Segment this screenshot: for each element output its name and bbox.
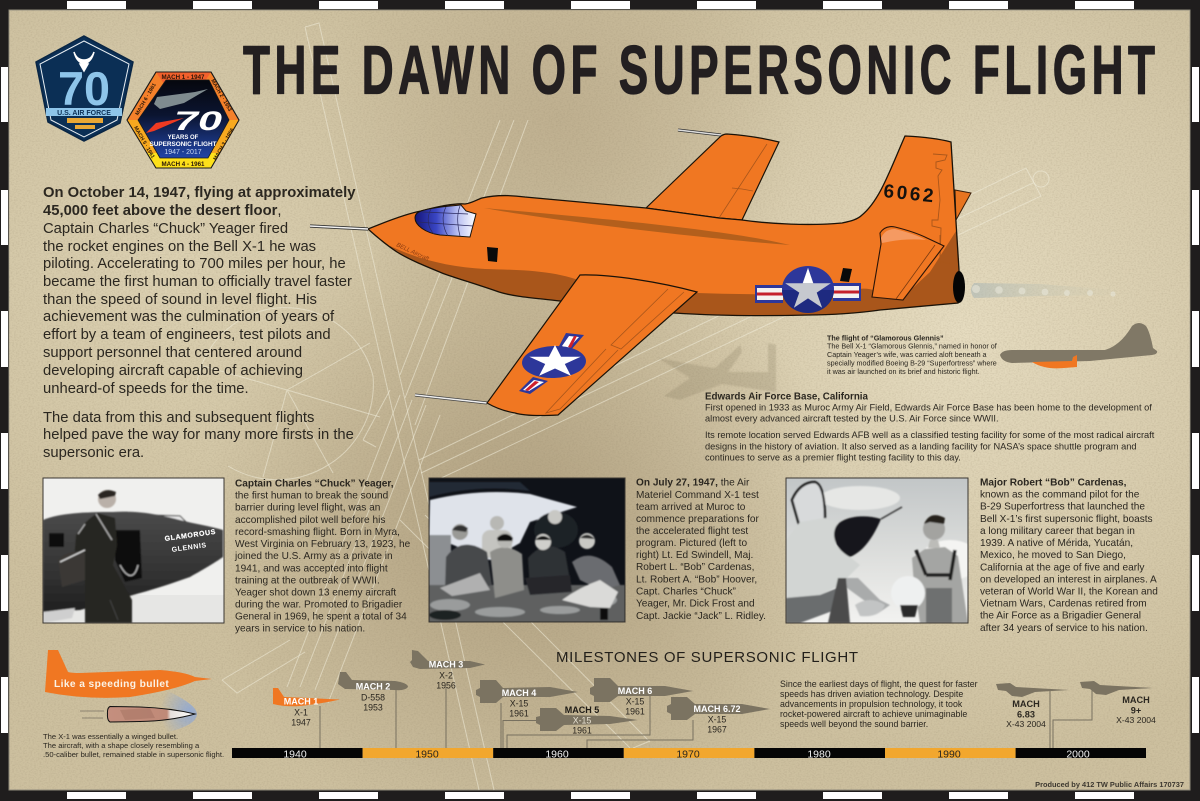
text: Captain Charles Yeager: training at the outbreak of WWII.	[235, 576, 380, 586]
milestone: Mach 6.83	[996, 683, 1069, 729]
photo: Yeager with Glamorous Glennis: GLENNIS	[171, 542, 207, 554]
badge: 70 years of supersonic flight: MACH 5 · 1961	[132, 125, 156, 160]
text: Edwards Air Force Base: Its remote location served Edwards AFB well as a classified testing facility for some of the most radical aircraft	[705, 430, 1155, 440]
wing roundel	[519, 333, 587, 394]
text: July 27, 1947: On July 27, 1947, the Air	[636, 478, 750, 488]
text: July 27, 1947: the accelerated flight test	[636, 526, 748, 537]
text: Captain Charles Yeager: barrier during level flight, was an	[235, 502, 380, 514]
intro text block: effort by a team of engineers, test pilots and	[43, 327, 331, 343]
illustration: orange Bell X-1	[310, 130, 971, 416]
badge: 70 years of supersonic flight: SUPERSONIC FLIGHT	[149, 141, 217, 148]
intro text block: support personnel that centered around	[43, 345, 302, 361]
milestone: Mach 4: X-15	[510, 698, 528, 708]
timeline bar by decade: 1960	[545, 748, 569, 760]
text: earliest days of flight: Since the earliest days of flight, the quest for faster	[780, 679, 978, 689]
text: Major Robert Cardenas: 1939. A native of Mérida, Yucatán,	[980, 538, 1133, 549]
text: Edwards Air Force Base: designs in the history of aviation. It also served as a landing facility for NASA’s space shuttle program and	[705, 442, 1137, 452]
text: Major Robert Cardenas: veteran of World War II, the Korean and	[980, 586, 1158, 598]
milestone: Mach 9+: MACH	[1122, 695, 1150, 705]
text: July 27, 1947: program. Pictured (left to	[636, 538, 747, 549]
text: earliest days of flight: speeds well beyond the sound barrier.	[780, 719, 928, 729]
text: Edwards Air Force Base: Edwards Air Force Base, California	[705, 392, 869, 402]
text: Captain Charles Yeager: Captain Charles “Chuck” Yeager,	[235, 478, 394, 490]
text: Captain Charles Yeager: during the war. Promoted to Brigadier	[235, 600, 403, 610]
text: Captain Charles Yeager: 1941, and was accepted into flight	[235, 564, 388, 574]
text: the flight of Glamorous Glennis: Captain Yeager’s wife, was carried aloft beneath a	[827, 350, 987, 359]
milestone: Mach 6.72: X-15	[708, 714, 726, 724]
near tailplane	[872, 227, 944, 300]
badge: 70 years of supersonic flight: MACH 6 · 1961	[135, 82, 158, 117]
text: Major Robert Cardenas: Bell X-1’s first supersonic flight, boasts	[980, 514, 1153, 525]
badge: 70 years of supersonic flight: YEARS OF	[168, 135, 199, 141]
faint white blueprint of the X-1 in the background	[197, 23, 1049, 790]
badge: 70 years of supersonic flight: MACH 3 · 1956	[213, 127, 236, 162]
text: X-1 winged bullet caption: The aircraft, with a shape closely resembling a	[43, 741, 200, 750]
text: Captain Charles Yeager: accomplished pilot well before his	[235, 515, 385, 526]
text: July 27, 1947: Capt. Jackie “Jack” L. Ridley.	[636, 611, 766, 622]
milestone: Mach 5: MACH 5	[565, 705, 599, 715]
intro text block: piloting. Accelerating to 700 miles per hour, he	[43, 256, 346, 272]
far wing	[646, 130, 779, 220]
text: July 27, 1947: commence preparations for	[636, 514, 760, 525]
milestone: Mach 9+: 9+	[1131, 706, 1141, 716]
text: the flight of Glamorous Glennis	[827, 334, 997, 376]
text: July 27, 1947: Capt. Charles “Chuck”	[636, 586, 736, 598]
text: Major Robert Cardenas: Vietnam Wars, Cardenas retired from	[980, 598, 1147, 610]
text: Captain Charles Yeager: the first human to break the sound	[235, 490, 388, 502]
photo frame 1	[43, 478, 224, 623]
fuselage windows	[487, 247, 852, 282]
milestone: Mach 6: MACH 6	[618, 686, 652, 696]
text: earliest days of flight: rocket-powered aircraft to achieve unimaginable	[780, 709, 967, 719]
timeline bar by decade: 1970	[676, 748, 700, 760]
icon: X-1 like a speeding bullet: Like a speeding bullet	[54, 679, 169, 690]
timeline bar by decade: 1980	[807, 748, 831, 760]
fuselage roundel	[755, 266, 861, 313]
intro text block	[43, 185, 356, 461]
milestone: Mach 4: 1961	[509, 708, 529, 718]
fuselage and tail fin	[368, 136, 968, 325]
intro text block: supersonic era.	[43, 445, 144, 461]
intro text block: Captain Charles “Chuck” Yeager fired	[43, 221, 288, 237]
timeline bar by decade: 2000	[1066, 748, 1090, 760]
heading: milestones of supersonic flight: MILESTONES OF SUPERSONIC FLIGHT	[556, 649, 858, 666]
badge: 70 years of supersonic flight: 1947 - 2017	[164, 149, 202, 156]
text: Major Robert Cardenas: Mexico, he moved to San Diego,	[980, 550, 1126, 561]
text: the flight of Glamorous Glennis: The Bell X-1 “Glamorous Glennis,” named in honor of	[827, 342, 997, 350]
timeline bar by decade: 1940	[283, 748, 307, 760]
text: July 27, 1947: right) Lt. Ed Swindell, Maj.	[636, 550, 753, 561]
badge: U.S. Air Force 70th anniversary: 70	[58, 62, 110, 115]
milestone: Mach 2: 1953	[363, 702, 383, 712]
milestone: Mach 6: 1961	[625, 706, 645, 716]
milestone: Mach 2: MACH 2	[356, 682, 390, 692]
text: Captain Charles Yeager: Yeager shot down 13 enemy aircraft	[235, 588, 396, 598]
photo: X-1 test team	[429, 478, 625, 622]
badge: U.S. Air Force 70th anniversary	[36, 36, 133, 141]
milestone: Mach 3: X-2	[439, 670, 453, 680]
badge: U.S. Air Force 70th anniversary: U.S. AIR FORCE	[57, 110, 111, 117]
text: the flight of Glamorous Glennis: The flight of “Glamorous Glennis”	[827, 334, 944, 342]
milestone: Mach 6.72: 1967	[707, 724, 727, 734]
text: Major Robert Cardenas: on developed an interest in airplanes. A	[980, 574, 1157, 586]
milestone: Mach 9+: X-43 2004	[1116, 715, 1156, 725]
milestone: Mach 5: 1961	[572, 726, 592, 736]
text: Major Robert Cardenas: after 34 years of service to his nation.	[980, 623, 1148, 634]
milestone: Mach 1: 1947	[291, 718, 311, 728]
milestone: Mach 4	[476, 680, 578, 718]
text: Edwards Air Force Base: continues to serve as a premier flight testing facility to this day.	[705, 452, 961, 462]
milestone: Mach 4: MACH 4	[502, 688, 536, 698]
text: Captain Charles Yeager: years in service to his nation.	[235, 624, 365, 634]
text: July 27, 1947: Robert L. “Bob” Cardenas,	[636, 562, 754, 573]
milestone: Mach 6	[590, 678, 693, 716]
photo: Cardenas with jet	[786, 478, 980, 623]
milestone: Mach 5	[536, 705, 638, 736]
near wing	[415, 275, 697, 416]
canopy	[415, 205, 476, 237]
text: Edwards Air Force Base: First opened in 1933 as Muroc Army Air Field, Edwards Air Force Base has been home to the development of	[705, 402, 1152, 412]
milestone: Mach 6.72	[667, 697, 770, 734]
text: X-1 winged bullet caption: .50-caliber bullet, remained stable in supersonic flight.	[43, 750, 224, 759]
photo frame 2	[429, 478, 625, 622]
badge: 70 years of supersonic flight	[127, 72, 239, 168]
text: Edwards Air Force Base: almost every advanced aircraft tested by the U.S. Air Force since WWII.	[705, 414, 999, 424]
milestone: Mach 6.72: MACH 6.72	[693, 704, 741, 714]
text: X-1 winged bullet caption	[43, 732, 224, 759]
intro text block: helped pave the way for many more firsts in the	[43, 427, 354, 443]
text: Captain Charles Yeager	[234, 478, 411, 634]
badge: 70 years of supersonic flight: MACH 1 - 1947	[162, 74, 205, 81]
text: Captain Charles Yeager: joined the U.S. Army as a private in	[234, 551, 393, 562]
shadow of B-29 on the ground	[658, 343, 776, 400]
milestone: Mach 1: X-1	[294, 708, 308, 718]
photo: Yeager with Glamorous Glennis: GLAMOROUS	[164, 529, 216, 543]
intro text block: the rocket engines on the Bell X-1 he was	[43, 239, 316, 255]
text: Major Robert Cardenas	[980, 478, 1158, 634]
milestone: Mach 9+	[1080, 681, 1156, 725]
intro text block: 45,000 feet above the desert floor,	[43, 203, 282, 219]
badge: 70 years of supersonic flight: MACH 2 · 1953	[209, 78, 233, 113]
intro text block: became the first human to officially travel faster	[43, 274, 352, 290]
badge: 70 years of supersonic flight: 70	[174, 106, 222, 136]
milestone: Mach 2	[338, 672, 408, 712]
intro text block: achievement was the culmination of years of	[43, 309, 335, 325]
text: earliest days of flight: advancements in propulsion technology, it took	[780, 699, 963, 709]
intro text block: than the speed of sound in level flight. His	[43, 292, 317, 308]
milestone: Mach 1: MACH 1	[284, 696, 318, 706]
milestone: Mach 5: X-15	[573, 716, 591, 726]
exhaust trail with shock diamonds	[971, 283, 1117, 298]
text: earliest days of flight	[780, 679, 978, 729]
title: THE DAWN OF SUPERSONIC FLIGHT	[243, 33, 1155, 109]
intro text block: On October 14, 1947, flying at approximately	[43, 185, 356, 201]
text: July 27, 1947: Materiel Command X-1 test	[636, 490, 759, 501]
intro text block: developing aircraft capable of achieving	[43, 363, 303, 379]
tail number 6062: 6062	[882, 181, 937, 207]
milestone: Mach 6.83: X-43 2004	[1006, 719, 1046, 729]
milestone: Mach 3: 1956	[436, 680, 456, 690]
connector lines to timeline	[320, 687, 1092, 748]
milestone: Mach 3	[410, 650, 485, 690]
badge: 70 years of supersonic flight: MACH 4 - 1961	[162, 161, 205, 168]
icon: .50-caliber bullet with shock wave	[80, 691, 197, 732]
milestone: Mach 3: MACH 3	[429, 660, 463, 670]
icon: B-29 carrying the X-1	[1000, 323, 1157, 368]
text: Major Robert Cardenas: a long military career that began in	[980, 526, 1135, 537]
icon: X-1 like a speeding bullet	[45, 650, 212, 698]
photo frame 3	[786, 478, 968, 623]
text: the flight of Glamorous Glennis: it was air launched on its brief and historic flight.	[827, 367, 980, 376]
text: the flight of Glamorous Glennis: specially modified Boeing B-29 “Superfortress” where	[827, 358, 997, 368]
photo: Yeager with Glamorous Glennis	[43, 478, 224, 623]
intro text block: unheard-of speeds for the time.	[43, 381, 249, 397]
text: Edwards Air Force Base	[705, 392, 1155, 462]
text: Captain Charles Yeager: record-smashing flight. Born in Myra,	[235, 527, 400, 538]
milestone: Mach 6.83: MACH	[1012, 699, 1040, 709]
text: Major Robert Cardenas: the Air Force as a Brigadier General	[980, 610, 1141, 622]
nose script: BELL Aircraft	[395, 242, 430, 263]
milestone: Mach 1	[273, 688, 340, 728]
text: July 27, 1947: team arrived at Muroc to	[636, 502, 746, 513]
engine nozzle	[953, 271, 965, 303]
text: Captain Charles Yeager: General in 1969, he spent a total of 34	[235, 612, 407, 622]
credit line: Produced by 412 TW Public Affairs 170737	[1035, 780, 1184, 789]
milestone: Mach 6.83: 6.83	[1017, 710, 1035, 720]
text: July 27, 1947: Yeager, Mr. Dick Frost and	[636, 598, 755, 610]
intro text block: The data from this and subsequent flights	[43, 410, 314, 426]
milestone: Mach 6: X-15	[626, 696, 644, 706]
text: X-1 winged bullet caption: The X-1 was essentially a winged bullet.	[43, 732, 178, 741]
timeline bar by decade: 1950	[415, 748, 439, 760]
text: Major Robert Cardenas: known as the command pilot for the	[980, 490, 1140, 500]
far tailplane	[955, 190, 971, 220]
text: Major Robert Cardenas: B-29 Superfortress that launched the	[980, 502, 1145, 512]
nose probe	[310, 226, 368, 229]
milestone: Mach 2: D-558	[361, 692, 385, 702]
text: earliest days of flight: speeds has driven aviation technology. Despite	[780, 689, 963, 699]
text: July 27, 1947	[636, 478, 766, 622]
text: Major Robert Cardenas: Major Robert “Bob” Cardenas,	[980, 478, 1127, 488]
text: July 27, 1947: Lt. Robert A. “Bob” Hoover,	[636, 574, 757, 586]
text: Major Robert Cardenas: California at the age of five and early	[980, 562, 1145, 574]
timeline bar by decade	[232, 748, 1146, 760]
men	[534, 512, 578, 548]
timeline bar by decade: 1990	[937, 748, 961, 760]
text: Captain Charles Yeager: West Virginia on February 13, 1923, he	[235, 539, 411, 550]
